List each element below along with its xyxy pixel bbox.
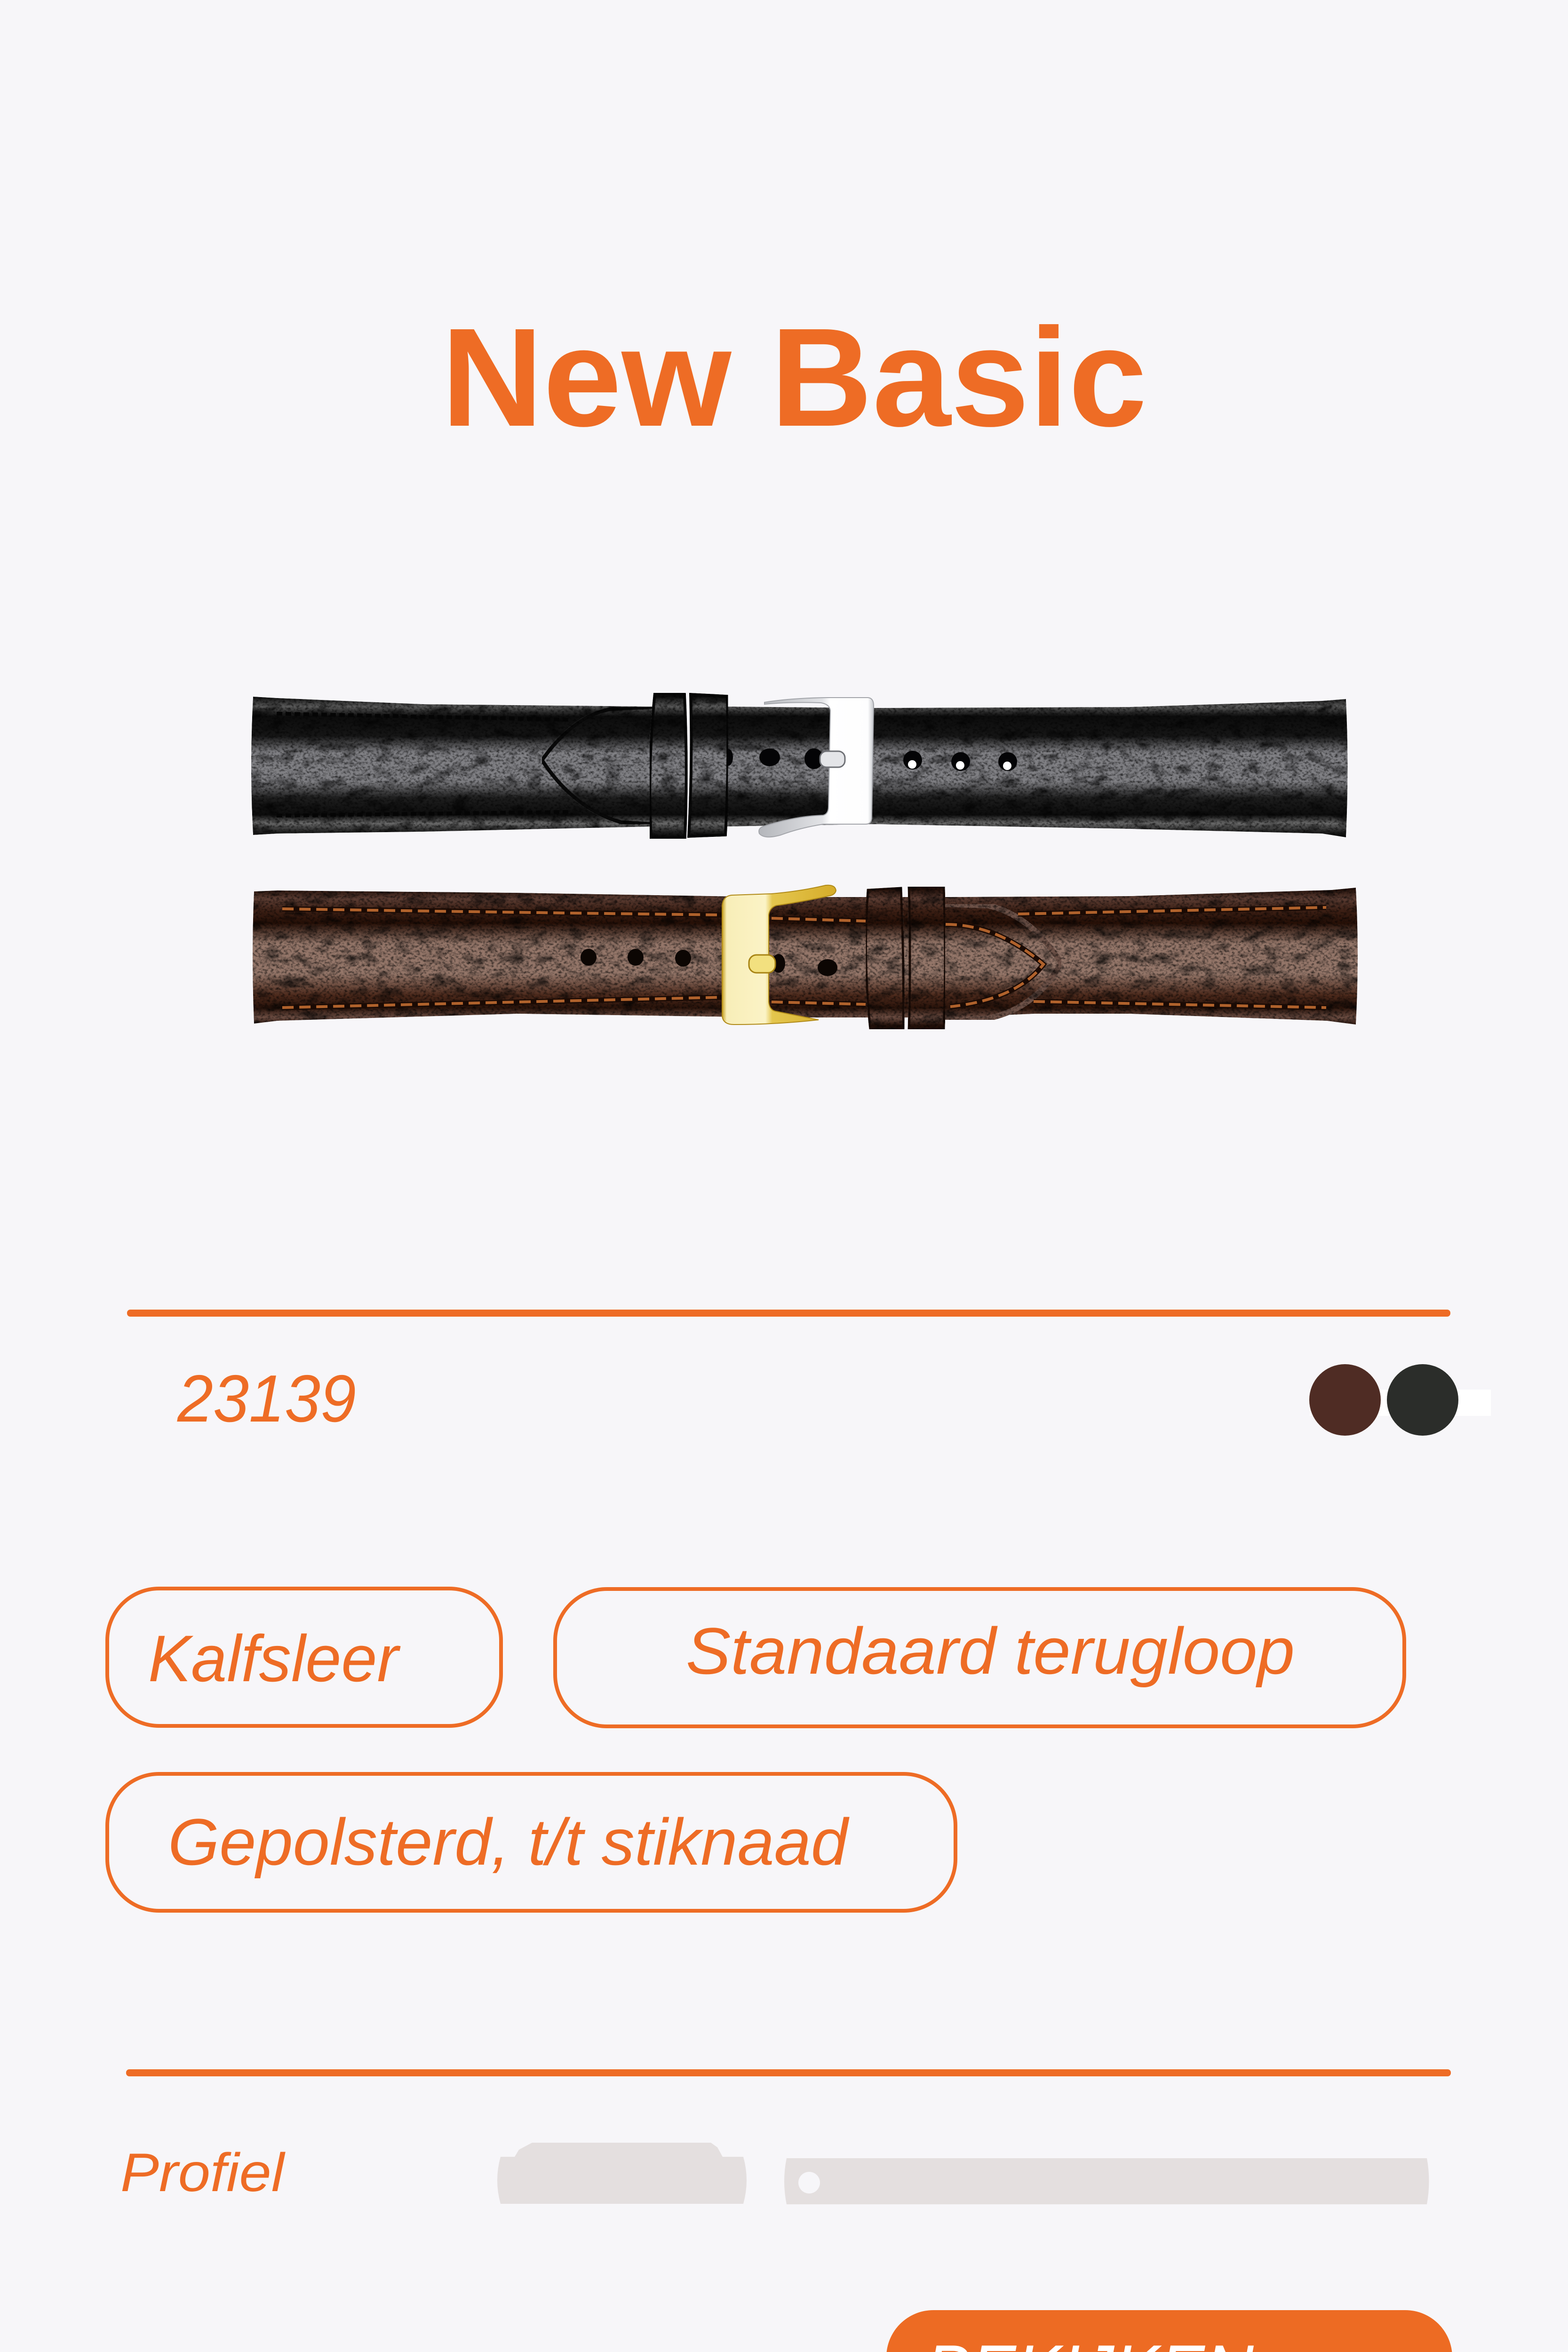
article number: 23139 [177,1361,356,1436]
brown strap: stitching [282,907,1326,1008]
gold buckle [722,885,836,1025]
black strap: short side [724,699,1347,837]
brown strap: long side [762,888,1358,1025]
brown strap: pointed tip [941,904,1061,1020]
top divider [127,1310,1450,1317]
tag: Kalfsleer [107,1589,501,1726]
black strap: holes [724,748,1017,771]
bottom divider [126,2069,1451,2076]
white bar behind swatches [1310,1390,1491,1416]
silver buckle [759,698,874,837]
profile label: Profiel [120,2143,286,2203]
title: New Basic [441,299,1147,456]
tag: Kalfsleer: Kalfsleer [148,1621,401,1695]
black strap: loops [650,693,728,839]
black strap: long side [251,697,654,835]
tag: Gepolsterd, t/t stiknaad [107,1774,955,1911]
black strap: pointed tip [542,707,654,824]
gold buckle: pin [749,955,775,973]
profile diagram [497,2143,1429,2204]
tag: Gepolsterd, t/t stiknaad: Gepolsterd, t/t stiknaad [168,1805,850,1879]
profile: strap section [784,2158,1429,2204]
profile: buckle end section [497,2143,747,2204]
colour swatches [1309,1364,1491,1436]
tag: Standaard terugloop: Standaard terugloop [686,1614,1295,1688]
silver buckle: pin [820,751,845,767]
black strap: stitching [277,712,1326,816]
brown strap: short side [253,890,772,1024]
button: Bekijken [886,2310,1452,2352]
brown strap: loops [866,887,945,1029]
swatch: black [1387,1364,1458,1436]
black leather strap with silver buckle [251,693,1347,839]
profile: hole [798,2172,820,2193]
brown strap: stitching shadow [282,907,1326,1008]
brown strap: holes [581,949,837,976]
black strap: hole highlights [908,760,1011,770]
brown leather strap with gold buckle [253,885,1358,1029]
swatch: brown [1309,1364,1381,1436]
tag: Standaard terugloop [555,1589,1404,1726]
